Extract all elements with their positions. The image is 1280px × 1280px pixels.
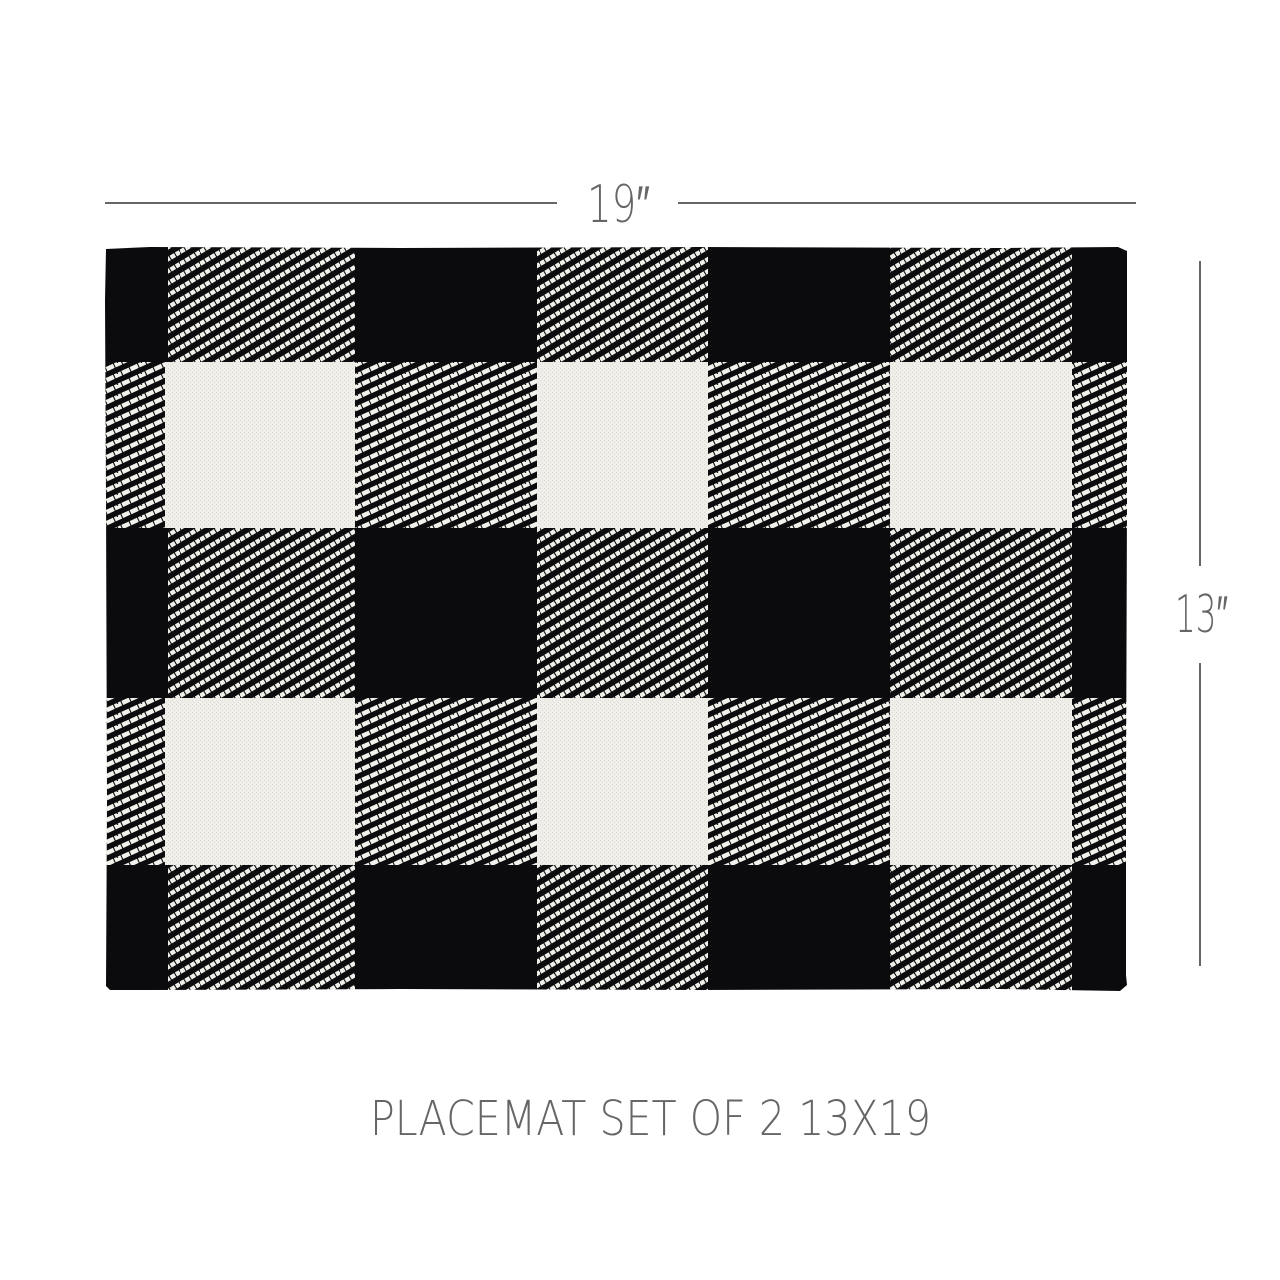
upper height line — [1199, 261, 1201, 566]
row 4 — [100, 698, 1130, 865]
placemat: buffalo check — [100, 245, 1130, 995]
height label: 13″ — [1175, 585, 1228, 645]
row 2 — [100, 362, 1130, 528]
row 1 — [100, 245, 1130, 362]
row 3 — [100, 528, 1130, 698]
row 5 — [100, 865, 1130, 995]
width label: 19″ — [587, 175, 650, 235]
right width line — [678, 202, 1136, 204]
lower height line — [1199, 663, 1201, 966]
caption: PLACEMAT SET OF 2 13X19 — [370, 1091, 931, 1147]
left width line — [105, 202, 557, 204]
